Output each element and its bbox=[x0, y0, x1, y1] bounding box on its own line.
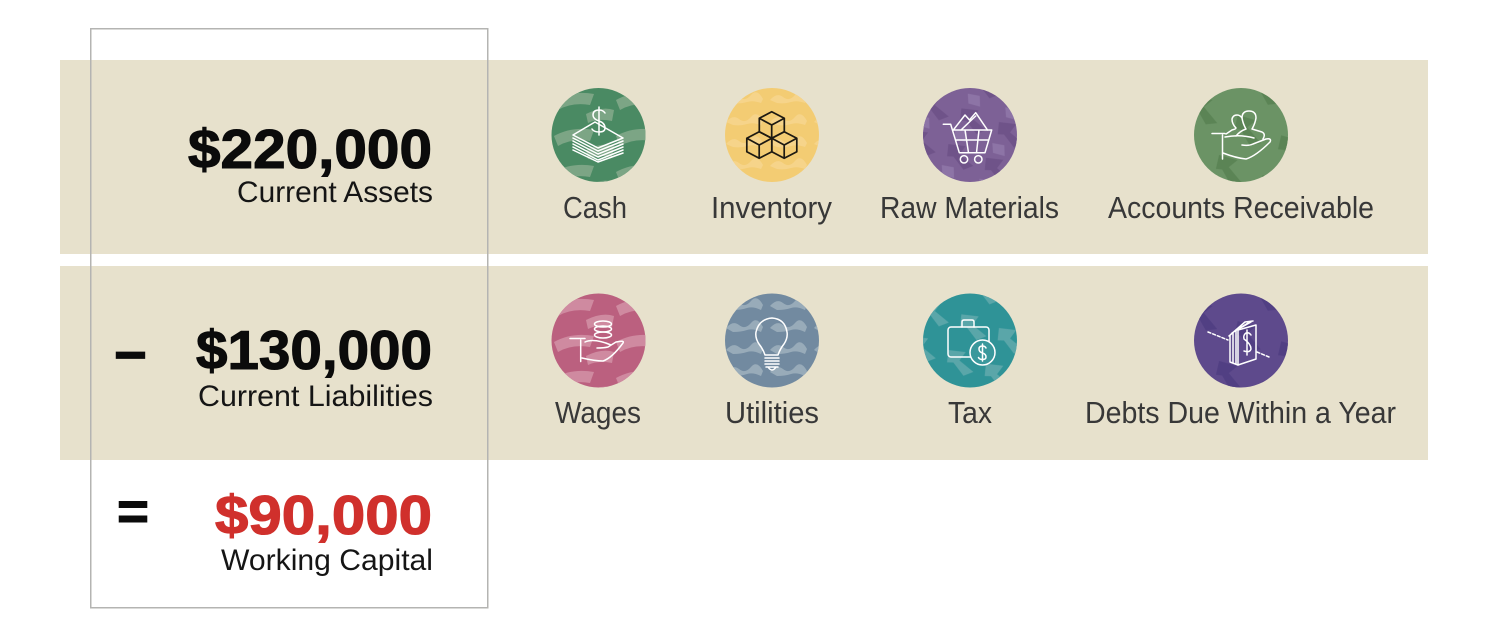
panel: current liabilities band bbox=[60, 266, 1428, 460]
icon: utilities light bulb bbox=[725, 294, 819, 388]
label: wages: Wages bbox=[555, 395, 641, 430]
label: utilities: Utilities bbox=[725, 395, 819, 430]
current liabilities figure: $130,000 bbox=[196, 319, 432, 381]
minus sign: – bbox=[115, 320, 146, 382]
label: debts due within a year: Debts Due Within a Year bbox=[1085, 395, 1396, 430]
label: accounts receivable: Accounts Receivable bbox=[1108, 190, 1374, 225]
panel: totals outline box bbox=[91, 29, 488, 608]
icon: accounts receivable bbox=[1194, 88, 1288, 182]
current assets label: Current Assets bbox=[237, 176, 433, 209]
icon: inventory boxes bbox=[725, 88, 819, 182]
label: raw materials: Raw Materials bbox=[880, 190, 1059, 225]
current liabilities label: Current Liabilities bbox=[198, 380, 433, 413]
equals sign: = bbox=[117, 480, 149, 542]
label: tax: Tax bbox=[948, 395, 992, 430]
label: cash: Cash bbox=[563, 190, 627, 225]
icon: wages bbox=[552, 294, 646, 388]
current assets figure: $220,000 bbox=[188, 118, 432, 180]
icon: debts book bbox=[1194, 294, 1288, 388]
icon: tax briefcase bbox=[923, 294, 1017, 388]
label: inventory: Inventory bbox=[711, 190, 832, 225]
working capital figure: $90,000 bbox=[215, 484, 432, 546]
icon: raw materials cart bbox=[923, 88, 1017, 182]
working capital label: Working Capital bbox=[221, 544, 433, 577]
panel: current assets band bbox=[60, 60, 1428, 254]
icon: cash bbox=[552, 88, 646, 182]
